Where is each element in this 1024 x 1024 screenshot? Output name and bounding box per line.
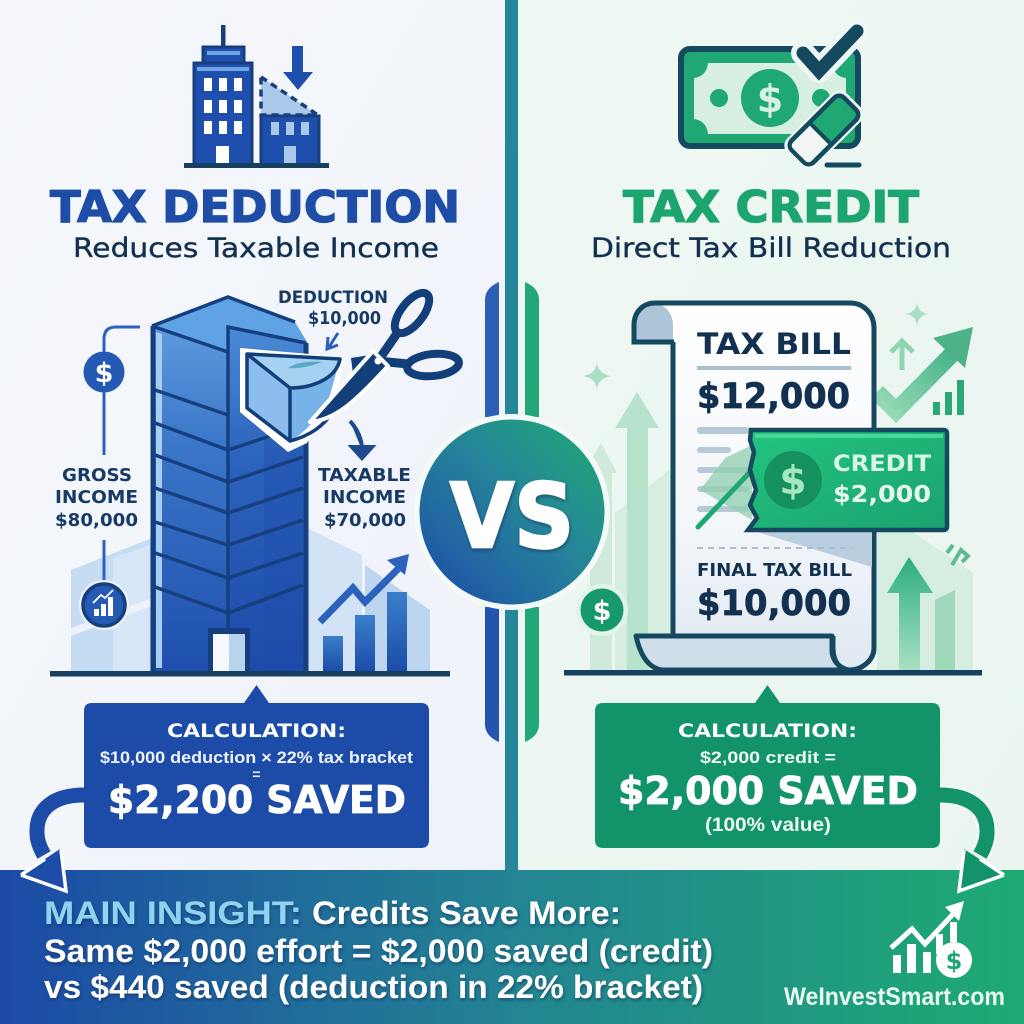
- icon: income bracket with dollar coin: [84, 327, 140, 455]
- label: gross income: [55, 465, 138, 531]
- icon: chart badge: [79, 540, 129, 630]
- illustration: skyline backdrop: [71, 528, 430, 672]
- label: deduction amount: [278, 288, 388, 349]
- credit card overlay: CREDIT: [833, 452, 931, 477]
- label: taxable income: INCOME: [323, 487, 406, 508]
- insight text: vs $440 saved (deduction in 22% bracket): [44, 969, 703, 1005]
- text: final tax bill: $10,000: [697, 584, 851, 624]
- logo: WeInvestSmart: [784, 901, 1005, 1011]
- insight text: [44, 895, 713, 1005]
- subheading: reduces taxable income: Reduces Taxable Income: [73, 233, 439, 264]
- VS badge: [414, 414, 610, 610]
- illustration: green rising arrows backdrop: [583, 302, 973, 670]
- text: final tax bill: FINAL TAX BILL: [697, 560, 852, 581]
- icon: scissors: [310, 287, 460, 422]
- calculation box: credit: [595, 685, 940, 848]
- logo: WeInvestSmart: $: [946, 947, 962, 975]
- subheading: direct tax bill reduction: Direct Tax Bill Reduction: [591, 233, 951, 264]
- calculation box: credit: (100% value): [705, 815, 831, 836]
- insight text: Credits Save More:: [312, 895, 621, 931]
- label: taxable income: $70,000: [324, 510, 406, 531]
- heading: tax deduction: TAX DEDUCTION: [50, 182, 460, 233]
- label: deduction amount: DEDUCTION: [278, 288, 388, 308]
- icon: money with check and eraser: $: [757, 77, 783, 121]
- icon: income bracket with dollar coin: $: [95, 358, 113, 389]
- ground line: right: [564, 670, 982, 676]
- text: tax bill amount: TAX BILL: [697, 327, 851, 361]
- illustration: cut-out piece of tower: [240, 348, 345, 452]
- side bars: left and right of VS: [485, 282, 539, 742]
- calculation box: deduction: CALCULATION:: [167, 720, 346, 742]
- insight text: Same $2,000 effort = $2,000 saved (credit): [44, 933, 713, 969]
- arrow: credit to insight: [940, 795, 1004, 891]
- panel: tax credit background: [518, 0, 1024, 870]
- text: final tax bill: [697, 548, 852, 624]
- calculation box: credit: CALCULATION:: [678, 720, 857, 742]
- calculation box: deduction: $2,200 SAVED: [108, 778, 406, 822]
- credit card overlay: $: [779, 459, 807, 504]
- logo: WeInvestSmart: WeInvestSmart.com: [784, 983, 1005, 1011]
- icon: green dollar coin: $: [593, 596, 611, 627]
- calculation box: credit: $2,000 credit =: [700, 748, 836, 767]
- label: taxable income: [318, 465, 411, 531]
- bill line items being erased: [697, 427, 752, 527]
- arrow: deduction to insight: [21, 795, 84, 891]
- bottom band: main insight: [0, 870, 1024, 1024]
- label: gross income: $80,000: [55, 510, 138, 531]
- calculation box: deduction: =: [252, 766, 261, 782]
- credit card overlay: $2,000: [833, 482, 931, 508]
- calculation box: deduction: [84, 685, 429, 848]
- label: deduction amount: $10,000: [308, 308, 381, 329]
- icon: green dollar coin: [576, 584, 628, 636]
- label: gross income: GROSS: [62, 465, 132, 486]
- illustration: tower with cut corner: [152, 297, 409, 672]
- label: gross income: INCOME: [55, 487, 138, 508]
- heading: tax credit: TAX CREDIT: [623, 182, 919, 233]
- arrow: to taxable income: [350, 421, 372, 458]
- ground line: left: [50, 671, 450, 676]
- calculation box: credit: $2,000 SAVED: [618, 769, 918, 813]
- VS badge: VS: [450, 464, 574, 568]
- text: tax bill amount: [697, 327, 851, 417]
- central divider: [505, 0, 518, 870]
- illustration: tax bill scroll: [634, 303, 874, 670]
- label: taxable income: TAXABLE: [318, 465, 411, 486]
- insight text: MAIN INSIGHT:: [44, 895, 302, 931]
- calculation box: deduction: $10,000 deduction × 22% tax bracket: [100, 748, 413, 767]
- text: tax bill amount: $12,000: [697, 377, 850, 417]
- icon: buildings with reduced roof: [184, 25, 329, 168]
- credit card overlay: [748, 430, 947, 530]
- panel: tax deduction background: [0, 0, 506, 870]
- icon: money with check and eraser: [681, 31, 868, 174]
